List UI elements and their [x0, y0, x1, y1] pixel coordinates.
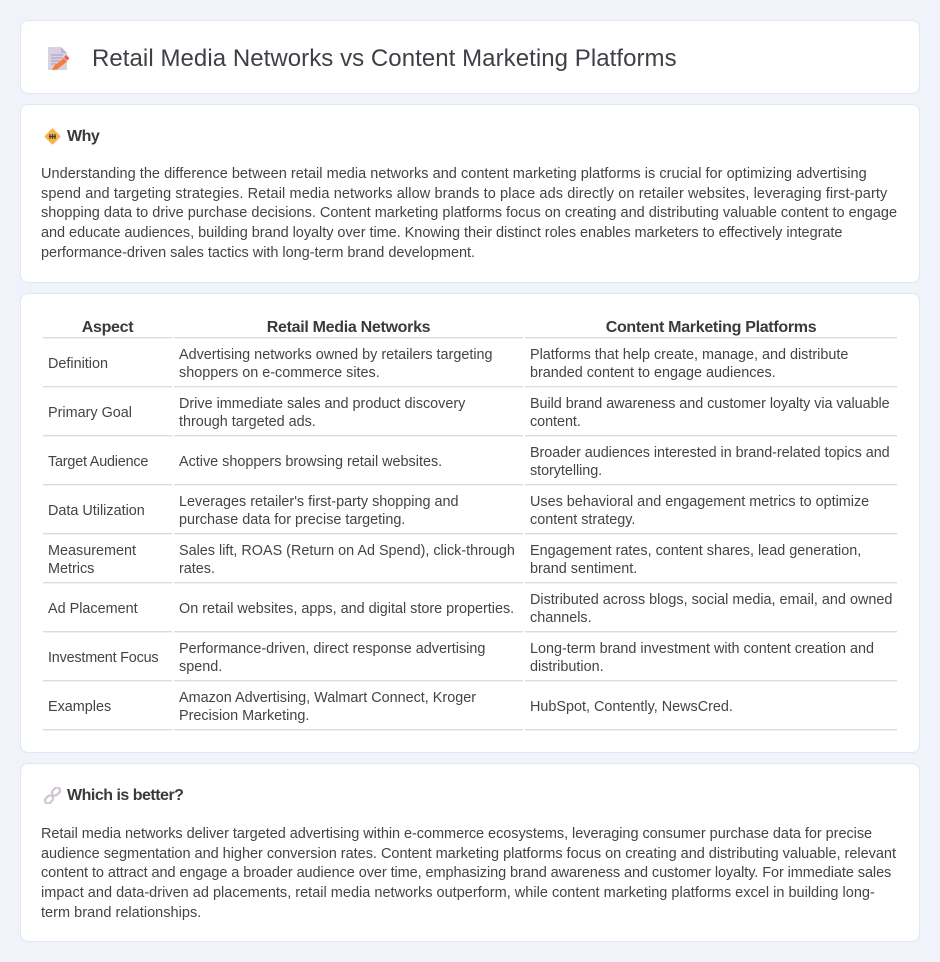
panel: comparison table [20, 293, 920, 753]
cell: investment focus content: distribution. [530, 659, 604, 675]
heading: why: Why [67, 128, 99, 145]
text: which is better paragraph: audience segmentation and higher conversion rates. Content marketing platforms focus on creating and distributing valuable, relevant [41, 846, 896, 862]
cell: examples retail [179, 690, 476, 724]
cell: ad placement retail: On retail websites, apps, and digital store properties. [179, 601, 514, 617]
row: definition: Definition [48, 356, 108, 372]
panel: which is better [20, 763, 920, 942]
row: measurement metrics: Metrics [48, 561, 94, 577]
cell: measurement metrics retail: Sales lift, ROAS (Return on Ad Spend), click-through [179, 543, 515, 559]
cell: investment focus content [530, 641, 874, 675]
icon: document with pencil [48, 47, 70, 70]
text: which is better paragraph: impact and data-driven ad placements, retail media networks outperform, while content marketing platforms excel in building long- [41, 885, 875, 901]
icon: warning diamond [44, 128, 60, 144]
cell: target audience content [530, 445, 890, 479]
cell: ad placement content: channels. [530, 610, 592, 626]
cell: definition retail: Advertising networks owned by retailers targeting [179, 347, 493, 363]
row: ad placement: Ad Placement [48, 601, 138, 617]
cell: examples retail: Amazon Advertising, Walmart Connect, Kroger [179, 690, 476, 706]
cell: primary goal retail: Drive immediate sales and product discovery [179, 396, 465, 412]
icon: link [44, 787, 61, 804]
row: examples: Examples [48, 699, 111, 715]
cell: definition content: branded content to engage audiences. [530, 365, 776, 381]
cell: investment focus retail: Performance-driven, direct response advertising [179, 641, 485, 657]
cell: investment focus retail: spend. [179, 659, 222, 675]
cell: data utilization content: content strategy. [530, 512, 635, 528]
cell: data utilization content [530, 494, 869, 528]
row: data utilization: Data Utilization [48, 503, 145, 519]
cell: measurement metrics content: Engagement rates, content shares, lead generation, [530, 543, 861, 559]
text: why paragraph [41, 166, 897, 261]
cell: definition content [530, 347, 848, 381]
text: which is better paragraph [41, 826, 896, 921]
row: primary goal: Primary Goal [48, 405, 132, 421]
text: why paragraph: performance-driven sales tactics with long-term brand development. [41, 245, 475, 261]
cell: primary goal retail: through targeted ads. [179, 414, 316, 430]
text: which is better paragraph: Retail media networks deliver targeted advertising within e-commerce ecosystems, leveraging consumer purchase data for precise [41, 826, 872, 842]
cell: data utilization retail [179, 494, 459, 528]
text: why paragraph: Understanding the difference between retail media networks and content marketing platforms is crucial for optimizing advertising [41, 166, 867, 182]
text: why paragraph: and educate audiences, building brand loyalty over time. Knowing their distinct roles enables marketers to effectively integrate [41, 225, 842, 241]
text: why paragraph: shopping data to drive purchase decisions. Content marketing platforms focus on creating and distributing valuable content to engage [41, 205, 897, 221]
cell: target audience content: Broader audiences interested in brand-related topics and [530, 445, 890, 461]
cell: primary goal content: Build brand awareness and customer loyalty via valuable [530, 396, 890, 412]
cell: data utilization retail: purchase data for precise targeting. [179, 512, 405, 528]
row: measurement metrics: Measurement [48, 543, 136, 559]
row: measurement metrics [48, 543, 136, 577]
cell: primary goal content: content. [530, 414, 581, 430]
cell: ad placement content: Distributed across blogs, social media, email, and owned [530, 592, 892, 608]
table header: content marketing platforms: Content Marketing Platforms [606, 319, 816, 336]
title: Retail Media Networks vs Content Marketing Platforms [92, 45, 677, 72]
cell: examples retail: Precision Marketing. [179, 708, 309, 724]
cell: measurement metrics retail [179, 543, 515, 577]
cell: target audience retail: Active shoppers browsing retail websites. [179, 454, 442, 470]
row: target audience: Target Audience [48, 454, 148, 470]
cell: definition content: Platforms that help create, manage, and distribute [530, 347, 848, 363]
cell: measurement metrics content: brand sentiment. [530, 561, 637, 577]
cell: data utilization content: Uses behavioral and engagement metrics to optimize [530, 494, 869, 510]
text: which is better paragraph: term brand relationships. [41, 905, 201, 921]
row: investment focus: Investment Focus [48, 650, 158, 666]
cell: definition retail [179, 347, 493, 381]
cell: target audience content: storytelling. [530, 463, 602, 479]
heading: which is better: Which is better? [67, 787, 183, 804]
text: which is better paragraph: content to attract and engage a broader audience over time, emphasizing brand awareness and customer loyalty. For immediate sales [41, 865, 891, 881]
table header: retail media networks: Retail Media Networks [267, 319, 430, 336]
text: why paragraph: spend and targeting strategies. Retail media networks allow brands to place ads directly on retailer websites, leveraging first-party [41, 186, 887, 202]
cell: measurement metrics content [530, 543, 861, 577]
cell: examples content: HubSpot, Contently, NewsCred. [530, 699, 733, 715]
cell: primary goal content [530, 396, 890, 430]
panel: header [20, 20, 920, 94]
cell: primary goal retail [179, 396, 466, 430]
table header: aspect: Aspect [82, 319, 133, 336]
panel: why [20, 104, 920, 283]
cell: ad placement content [530, 592, 892, 626]
cell: investment focus retail [179, 641, 485, 675]
cell: definition retail: shoppers on e-commerce sites. [179, 365, 380, 381]
cell: investment focus content: Long-term brand investment with content creation and [530, 641, 874, 657]
cell: measurement metrics retail: rates. [179, 561, 215, 577]
cell: data utilization retail: Leverages retailer's first-party shopping and [179, 494, 459, 510]
